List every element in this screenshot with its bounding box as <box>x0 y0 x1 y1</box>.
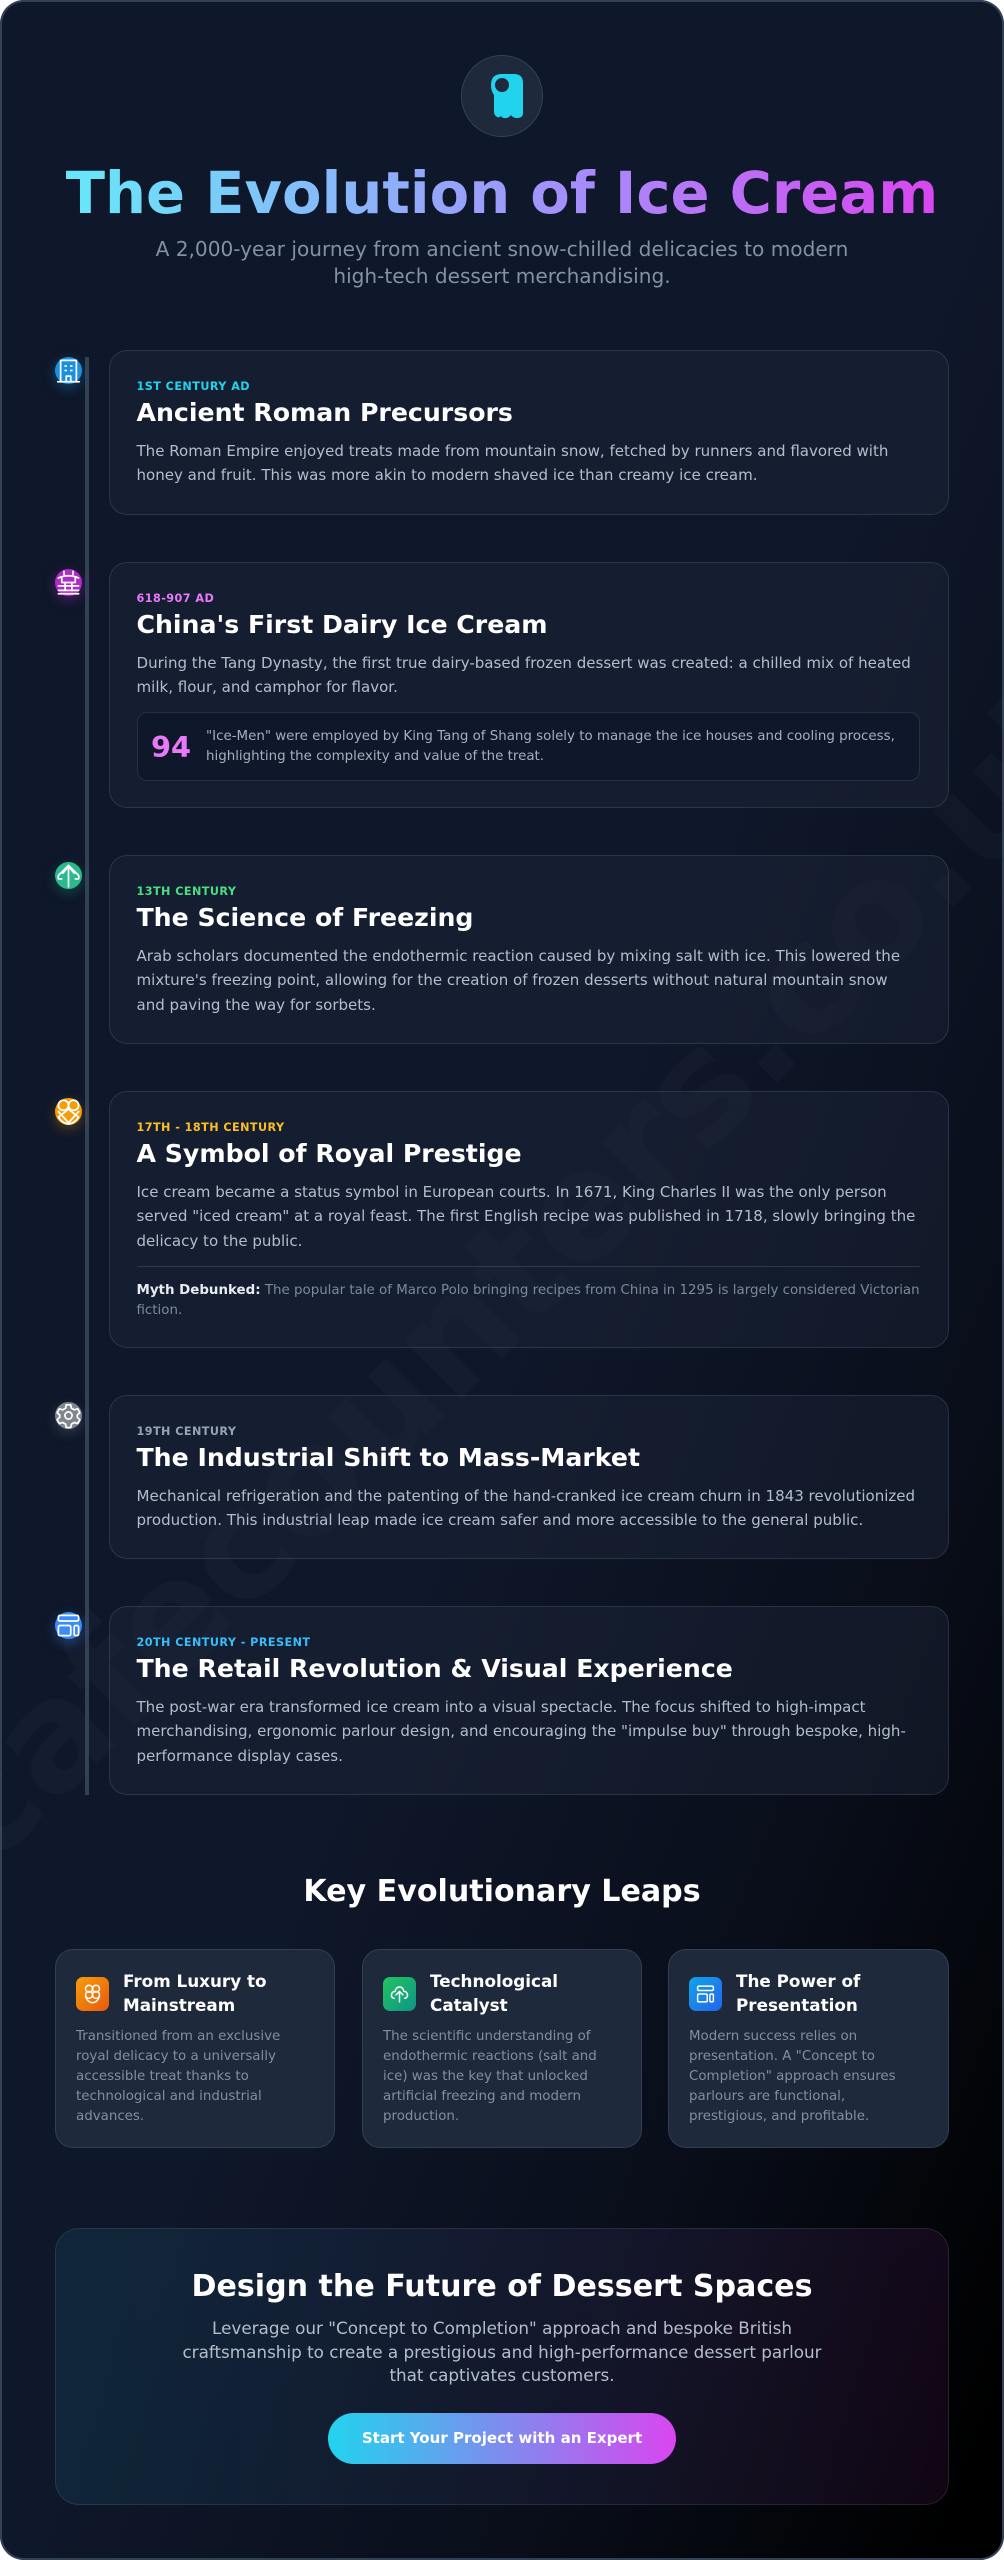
timeline card: A Symbol of Royal Prestige: A Symbol of Royal Prestige <box>136 1139 522 1168</box>
leap card: The Power of Presentation: presentation. A "Concept to <box>689 2049 875 2064</box>
stat callout: 94: highlighting the complexity and value of the treat. <box>206 749 544 764</box>
section heading: Key Evolutionary Leaps <box>303 1874 701 1909</box>
timeline card: The Science of Freezing: The Science of Freezing <box>136 903 473 932</box>
myth note <box>136 1266 920 1321</box>
stat callout: 94: 94 <box>151 730 191 764</box>
timeline card: A Symbol of Royal Prestige: served "iced cream" at a royal feast. The first English recipe was published in 1718, slowly bringing the <box>136 1207 915 1225</box>
timeline card: Ancient Roman Precursors: Ancient Roman Precursors <box>136 398 513 427</box>
timeline card: The Retail Revolution & Visual Experience: merchandising, ergonomic parlour design, and encouraging the "impulse buy" through bespoke, high- <box>136 1722 906 1740</box>
timeline line <box>85 357 89 1795</box>
leap card: Technological Catalyst: Technological <box>430 1971 558 1991</box>
timeline card: The Retail Revolution & Visual Experience: The Retail Revolution & Visual Experience <box>136 1654 733 1683</box>
timeline icon: gear <box>55 1402 82 1429</box>
timeline card: The Retail Revolution & Visual Experience <box>109 1606 949 1795</box>
CTA heading: Design the Future of Dessert Spaces <box>191 2269 813 2304</box>
icon: royal emblem <box>76 1977 109 2011</box>
leap card: From Luxury to Mainstream: technological and industrial <box>76 2089 262 2104</box>
stat callout: 94: "Ice-Men" were employed by King Tang of Shang solely to manage the ice houses and cooling process, <box>206 729 895 744</box>
timeline card: A Symbol of Royal Prestige: 17TH - 18TH CENTURY <box>136 1121 285 1134</box>
timeline card: A Symbol of Royal Prestige: Ice cream became a status symbol in European courts. In 1671, King Charles II was the only person <box>136 1183 887 1201</box>
timeline icon: temple <box>55 569 82 596</box>
leap card: Technological Catalyst: ice) was the key that unlocked <box>383 2069 588 2084</box>
timeline card: The Science of Freezing: Arab scholars documented the endothermic reaction caused by mixing salt with ice. This lowered the <box>136 947 900 965</box>
CTA text <box>182 2318 822 2385</box>
leap card: The Power of Presentation <box>668 1949 949 2148</box>
CTA text: Leverage our "Concept to Completion" approach and bespoke British <box>212 2318 792 2338</box>
timeline icon: crown emblem <box>55 1098 82 1125</box>
CTA text: that captivates customers. <box>389 2365 615 2385</box>
icon: layout <box>689 1977 722 2011</box>
myth note: Myth Debunked: The popular tale of Marco Polo bringing recipes from China in 1295 is largely considered Victorian <box>136 1283 920 1298</box>
subtitle: high-tech dessert merchandising. <box>333 264 671 288</box>
leap card: The Power of Presentation: The Power of <box>736 1971 860 1991</box>
subtitle <box>156 237 848 288</box>
timeline card: The Industrial Shift to Mass-Market: 19TH CENTURY <box>136 1425 236 1438</box>
timeline icon: display layout <box>55 1612 82 1639</box>
leap card: From Luxury to Mainstream: royal delicacy to a universally <box>76 2049 276 2064</box>
leap card: From Luxury to Mainstream: Mainstream <box>123 1994 235 2014</box>
timeline card: The Science of Freezing <box>109 855 949 1044</box>
timeline card: China's First Dairy Ice Cream: During the Tang Dynasty, the first true dairy-based frozen dessert was created: a chilled mix of heated <box>136 654 911 672</box>
leap card: Technological Catalyst: endothermic reactions (salt and <box>383 2049 597 2064</box>
leap card: Technological Catalyst: The scientific understanding of <box>383 2029 590 2044</box>
timeline card: A Symbol of Royal Prestige <box>109 1091 949 1348</box>
leap card: The Power of Presentation: parlours are functional, <box>689 2089 845 2104</box>
timeline card: Ancient Roman Precursors: 1ST CENTURY AD <box>136 380 250 393</box>
leap card: The Power of Presentation: prestigious, and profitable. <box>689 2109 869 2124</box>
leap card: Technological Catalyst: artificial freezing and modern <box>383 2089 581 2104</box>
leap card: Technological Catalyst <box>362 1949 642 2148</box>
timeline card: A Symbol of Royal Prestige: delicacy to the public. <box>136 1232 302 1250</box>
timeline card: The Science of Freezing: mixture's freezing point, allowing for the creation of frozen desserts without natural mountain snow <box>136 971 888 989</box>
timeline card: China's First Dairy Ice Cream <box>109 562 949 808</box>
header logo: ice cream icon <box>461 55 543 137</box>
title: The Evolution of Ice Cream <box>66 160 938 227</box>
timeline card: The Retail Revolution & Visual Experience: The post-war era transformed ice cream into a visual spectacle. The focus shifted to high-impact <box>136 1698 866 1716</box>
leap card: Technological Catalyst: Catalyst <box>430 1994 508 2014</box>
timeline card: Ancient Roman Precursors: honey and fruit. This was more akin to modern shaved ice than creamy ice cream. <box>136 466 758 484</box>
leap card: The Power of Presentation: Presentation <box>736 1994 858 2014</box>
leap card: From Luxury to Mainstream: From Luxury to <box>123 1971 267 1991</box>
leap card: From Luxury to Mainstream: Transitioned from an exclusive <box>76 2029 280 2044</box>
timeline card: The Science of Freezing: and paving the way for sorbets. <box>136 996 376 1014</box>
timeline card: Ancient Roman Precursors: The Roman Empire enjoyed treats made from mountain snow, fetched by runners and flavored with <box>136 442 888 460</box>
timeline card: China's First Dairy Ice Cream: 618-907 AD <box>136 592 214 605</box>
timeline card: The Science of Freezing: 13TH CENTURY <box>136 885 236 898</box>
CTA button <box>328 2413 676 2464</box>
timeline card: The Retail Revolution & Visual Experience: performance display cases. <box>136 1747 343 1765</box>
leap card: From Luxury to Mainstream: advances. <box>76 2109 144 2124</box>
timeline card: The Retail Revolution & Visual Experience: 20TH CENTURY - PRESENT <box>136 1636 310 1649</box>
timeline icon: building <box>55 357 82 384</box>
leap card: From Luxury to Mainstream: accessible treat thanks to <box>76 2069 249 2084</box>
CTA text: craftsmanship to create a prestigious and high-performance dessert parlour <box>182 2342 822 2362</box>
timeline card: The Industrial Shift to Mass-Market: production. This industrial leap made ice cream safer and more accessible to the general public. <box>136 1511 863 1529</box>
timeline card: The Industrial Shift to Mass-Market <box>109 1395 949 1559</box>
icon: upload cloud <box>383 1977 416 2011</box>
myth note: fiction. <box>136 1303 182 1318</box>
timeline card: Ancient Roman Precursors <box>109 350 949 515</box>
call to action panel <box>55 2228 949 2505</box>
CTA button: Start Your Project with an Expert <box>362 2429 642 2447</box>
leap card: The Power of Presentation: Completion" approach ensures <box>689 2069 896 2084</box>
timeline icon: freezing <box>55 862 82 889</box>
stat callout: 94 <box>137 712 920 781</box>
leap card: From Luxury to Mainstream <box>55 1949 335 2148</box>
timeline card: The Industrial Shift to Mass-Market: Mechanical refrigeration and the patenting of the hand-cranked ice cream churn in 1843 revolutionized <box>136 1487 915 1505</box>
timeline card: China's First Dairy Ice Cream: China's First Dairy Ice Cream <box>136 610 548 639</box>
leap card: Technological Catalyst: production. <box>383 2109 459 2124</box>
timeline card: China's First Dairy Ice Cream: milk, flour, and camphor for flavor. <box>136 678 398 696</box>
subtitle: A 2,000-year journey from ancient snow-chilled delicacies to modern <box>156 237 848 261</box>
timeline card: The Industrial Shift to Mass-Market: The Industrial Shift to Mass-Market <box>136 1443 640 1472</box>
leap card: The Power of Presentation: Modern success relies on <box>689 2029 857 2044</box>
